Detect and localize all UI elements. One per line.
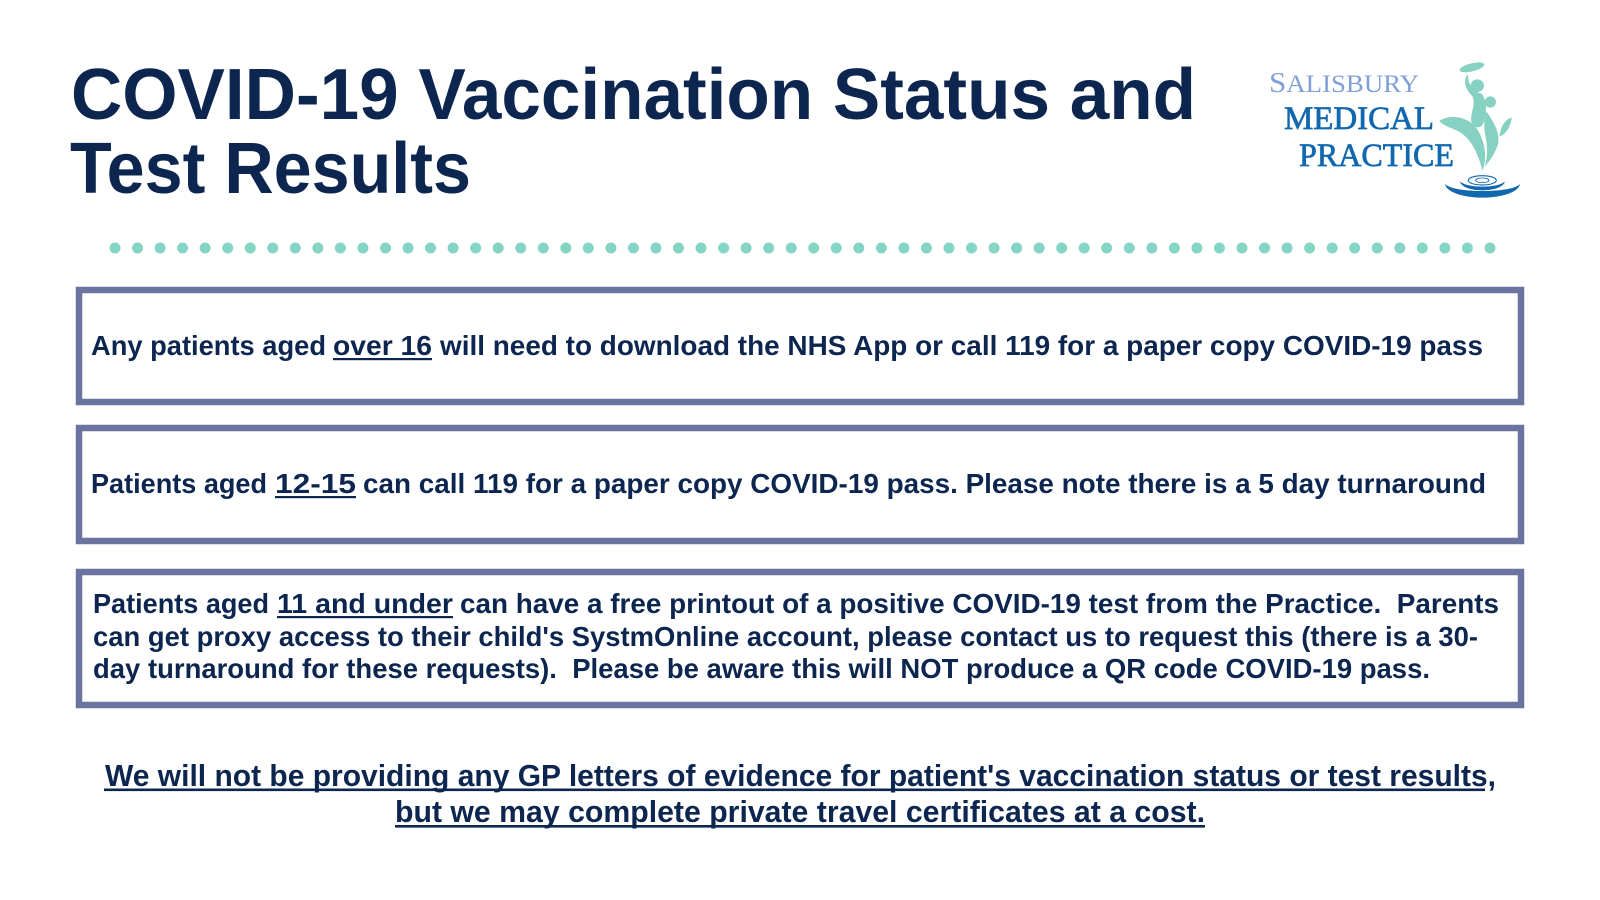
panel: 11 and under [79, 572, 1521, 705]
logo: Salisbury Medical Practice: PRACTICE [1299, 138, 1454, 174]
closing statement: We will not be providing any GP letters of evidence for patient's vaccination status or test results, [105, 758, 1496, 793]
panel: over 16: over 16 [333, 330, 432, 361]
title: Test Results [70, 129, 471, 209]
panel: 11 and under: can get proxy access to their child's SystmOnline account, please contact us to request this (there is a 30- [93, 621, 1478, 652]
logo: Salisbury Medical Practice: MEDICAL [1284, 101, 1434, 137]
panel: 11 and under: day turnaround for these requests). Please be aware this will NOT produce a QR code COVID-19 pass. [93, 653, 1430, 684]
closing statement: but we may complete private travel certificates at a cost. [395, 794, 1205, 829]
logo: Salisbury Medical Practice: SALISBURY [1269, 67, 1419, 99]
panel: over 16: will need to download the NHS App or call 119 for a paper copy COVID-19 pass [439, 330, 1483, 361]
closing statement [104, 758, 1496, 829]
panel: 12-15 [79, 428, 1521, 541]
title [70, 55, 1196, 209]
panel: 12-15: Patients aged [91, 468, 267, 499]
panel: 11 and under: 11 and under [277, 588, 453, 619]
panel: 12-15: can call 119 for a paper copy COVID-19 pass. Please note there is a 5 day turnaround [363, 468, 1486, 499]
panel: 11 and under: can have a free printout of a positive COVID-19 test from the Practice. Parents [460, 588, 1499, 619]
title: COVID-19 Vaccination Status and [71, 55, 1196, 135]
panel: over 16: Any patients aged [91, 330, 326, 361]
panel: over 16 [79, 290, 1521, 402]
panel: 12-15: 12-15 [275, 468, 356, 499]
panel: 11 and under: Patients aged [93, 588, 269, 619]
logo: Salisbury Medical Practice [1269, 60, 1520, 198]
